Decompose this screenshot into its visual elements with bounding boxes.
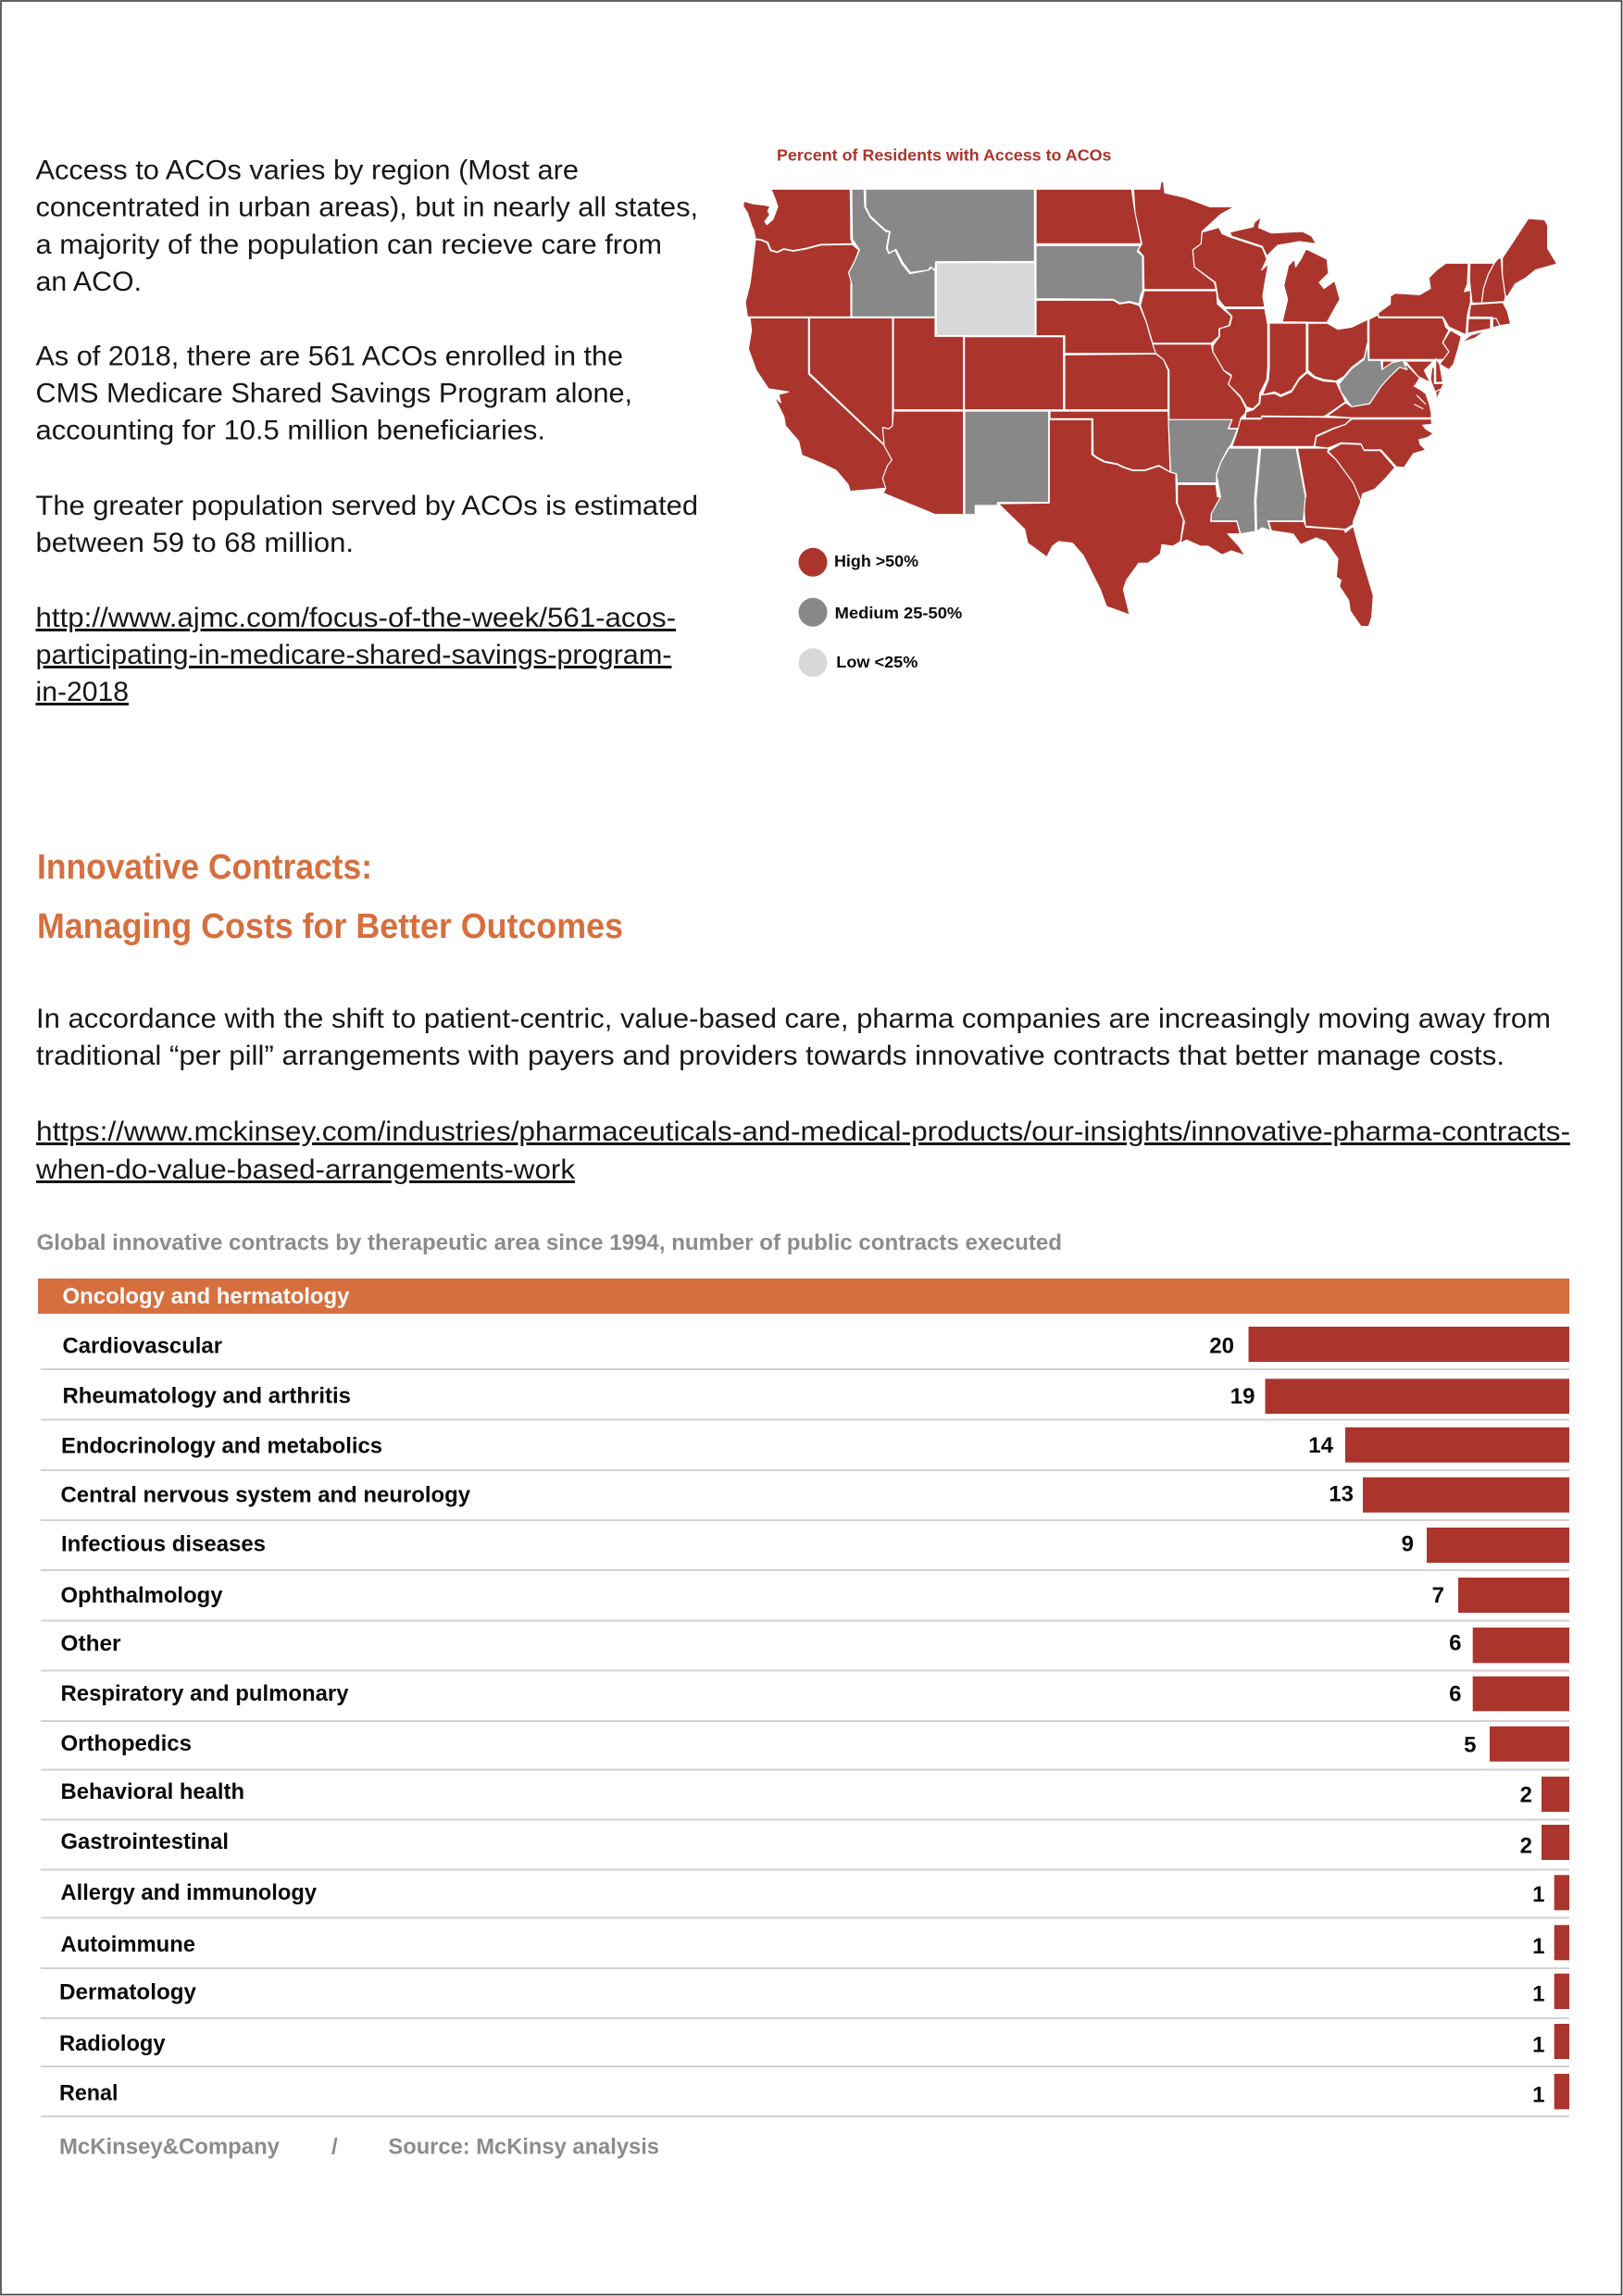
chart row: Rheumatology and arthritis	[63, 1379, 1569, 1414]
state: Arkansas	[1168, 419, 1238, 483]
state: Wyoming	[936, 263, 1035, 336]
chart row: Infectious diseases	[61, 1528, 1569, 1563]
text block: ACO access	[35, 156, 698, 297]
state: Nevada	[809, 318, 893, 444]
chart row: Autoimmune	[61, 1925, 1569, 1960]
state: Ohio	[1308, 319, 1367, 381]
chart row: Cardiovascular: 20	[1209, 1334, 1234, 1359]
text block: ACO access: an ACO.	[35, 267, 142, 297]
chart row: Allergy and immunology: 1	[1532, 1882, 1544, 1907]
chart row: Gastrointestinal: 2	[1520, 1834, 1532, 1859]
state: Maine	[1503, 218, 1557, 296]
state: Idaho	[849, 189, 935, 317]
chart row: Radiology: 1	[1532, 2033, 1544, 2058]
text block: McKinsey link: https://www.mckinsey.com/industries/pharmaceuticals-and-medical-products/our-insights/innovative-pharma-contracts-	[36, 1117, 1570, 1147]
state: Vermont	[1469, 263, 1494, 303]
chart row: Rheumatology and arthritis: 19	[1230, 1384, 1255, 1409]
legend: medium	[798, 598, 963, 627]
state: Georgia	[1297, 448, 1361, 530]
state: Colorado	[965, 337, 1064, 410]
text block: contracts intro: traditional “per pill” arrangements with payers and providers towards innovative contracts that better manage costs.	[36, 1041, 1504, 1071]
state: Massachusetts	[1469, 303, 1511, 326]
legend: high	[798, 548, 918, 577]
chart row: Radiology	[59, 2024, 1569, 2059]
state: New Mexico	[965, 411, 1049, 515]
state: Utah	[893, 318, 964, 410]
state: Oregon	[745, 240, 859, 317]
state: Texas	[998, 419, 1183, 615]
state: Illinois	[1213, 308, 1267, 409]
state: Minnesota	[1133, 181, 1234, 290]
state: Long Island	[1461, 331, 1485, 343]
legend: low	[798, 648, 918, 677]
state: Louisiana	[1178, 484, 1245, 555]
footer source line: /	[331, 2135, 338, 2160]
text block: AJMC link: participating-in-medicare-shared-savings-program-	[35, 640, 672, 670]
chart row: Other: Other	[61, 1631, 120, 1656]
chart row: Renal: Renal	[59, 2081, 119, 2105]
text block: CMS enrollment: accounting for 10.5 million beneficiaries.	[35, 415, 545, 446]
text block: ACO access: Access to ACOs varies by region (Most are	[35, 156, 579, 185]
state: Tennessee	[1232, 417, 1352, 446]
state: Maryland eastern shore	[1430, 368, 1443, 392]
state: North Dakota	[1036, 189, 1142, 243]
text block: McKinsey link: when-do-value-based-arrangements-work	[35, 1154, 576, 1185]
chart row: Orthopedics	[61, 1727, 1569, 1762]
text block: CMS enrollment: As of 2018, there are 561 ACOs enrolled in the	[35, 341, 623, 372]
state: Wisconsin	[1192, 228, 1268, 307]
chart row: Oncology and hermatology	[38, 1279, 1569, 1314]
chart row: Dermatology: 1	[1532, 1982, 1544, 2007]
state: California	[748, 318, 892, 492]
state: Mississippi	[1211, 448, 1259, 534]
state: Kentucky	[1245, 373, 1345, 418]
state: Pennsylvania	[1369, 315, 1449, 359]
chart subtitle: Global innovative contracts by therapeutic area since 1994, number of public contracts executed	[37, 1230, 1062, 1255]
map title: Percent of Residents with Access to ACOs	[777, 146, 1112, 165]
heading: innovative contracts	[37, 848, 623, 946]
chart row: Autoimmune: 1	[1532, 1934, 1544, 1959]
state: Washington	[743, 189, 853, 252]
chart row: Allergy and immunology	[61, 1875, 1569, 1910]
state: Florida	[1268, 521, 1373, 627]
chart row: Central nervous system and neurology: Central nervous system and neurology	[61, 1483, 471, 1507]
chart row: Dermatology: Dermatology	[59, 1979, 197, 2005]
chart row: Behavioral health: 2	[1520, 1783, 1532, 1808]
chart row: Orthopedics: Orthopedics	[61, 1731, 192, 1756]
heading: innovative contracts: Innovative Contracts:	[37, 848, 372, 887]
chart row: Infectious diseases: Infectious diseases	[61, 1532, 266, 1557]
state: Connecticut	[1467, 318, 1491, 333]
chart row: Other	[61, 1628, 1569, 1663]
state: Indiana	[1262, 323, 1306, 395]
state: Montana	[866, 189, 1034, 272]
chart row: Other: 6	[1449, 1631, 1461, 1655]
state: New Hampshire	[1481, 258, 1505, 303]
chart row: Cardiovascular	[63, 1327, 1569, 1362]
state: Missouri	[1153, 344, 1246, 429]
legend: medium: Medium 25-50%	[835, 604, 963, 622]
text block: CMS enrollment	[35, 341, 632, 446]
state: Alabama	[1256, 448, 1305, 531]
footer source line: Source: McKinsy analysis	[388, 2135, 659, 2160]
chart row: Cardiovascular: Cardiovascular	[63, 1334, 222, 1359]
chart row: Ophthalmology: 7	[1432, 1583, 1444, 1608]
text block: population estimate: between 59 to 68 million.	[35, 528, 354, 558]
state: North Carolina	[1315, 419, 1433, 468]
text block: AJMC link	[35, 603, 676, 707]
state: Iowa	[1141, 291, 1231, 343]
state: Michigan upper	[1230, 217, 1317, 256]
text block: ACO access: concentrated in urban areas), but in nearly all states,	[35, 193, 698, 222]
heading: innovative contracts: Managing Costs for Better Outcomes	[37, 907, 623, 946]
state: Kansas	[1065, 354, 1168, 410]
chart row: Behavioral health	[61, 1777, 1569, 1812]
state: Michigan lower	[1282, 249, 1340, 322]
chart row: Ophthalmology: Ophthalmology	[61, 1583, 223, 1608]
chart row: Endocrinology and metabolics	[61, 1428, 1569, 1463]
footer source line	[59, 2135, 659, 2160]
legend: high: High >50%	[834, 552, 918, 570]
chart row: Dermatology	[59, 1974, 1569, 2009]
chart row: Respiratory and pulmonary: Respiratory and pulmonary	[61, 1681, 349, 1706]
text block: population estimate: The greater population served by ACOs is estimated	[35, 491, 698, 521]
chart row: Allergy and immunology: Allergy and immunology	[61, 1880, 318, 1905]
chart row: Central nervous system and neurology	[61, 1478, 1569, 1513]
state: West Virginia	[1339, 344, 1407, 406]
state: Rhode Island	[1492, 318, 1500, 328]
state: Virginia eastern shore	[1435, 385, 1442, 400]
chart row: Oncology and hermatology: Oncology and hermatology	[63, 1284, 350, 1309]
states: high access	[743, 181, 1557, 627]
chart row: Ophthalmology	[61, 1578, 1569, 1613]
state: South Carolina	[1328, 443, 1395, 502]
state: New York	[1378, 263, 1470, 335]
text block: McKinsey link	[35, 1117, 1570, 1185]
text block: ACO access: a majority of the population can recieve care from	[35, 230, 662, 260]
legend: low: Low <25%	[836, 653, 918, 671]
chart row: Gastrointestinal: Gastrointestinal	[61, 1829, 229, 1854]
chart row: Gastrointestinal	[61, 1825, 1569, 1860]
chart row: Renal	[59, 2074, 1569, 2109]
state: Delaware	[1436, 358, 1442, 382]
state: Nebraska	[1036, 300, 1156, 354]
state: Maryland	[1382, 361, 1433, 382]
text block: contracts intro	[36, 1004, 1551, 1071]
states: low access	[936, 263, 1035, 336]
chart row: Behavioral health: Behavioral health	[61, 1779, 244, 1804]
chart row: Respiratory and pulmonary	[61, 1677, 1569, 1711]
chart row: Endocrinology and metabolics: 14	[1308, 1433, 1334, 1458]
chart row: Renal: 1	[1532, 2083, 1544, 2108]
chart row: Infectious diseases: 9	[1402, 1532, 1414, 1557]
state: South Dakota	[1036, 245, 1142, 304]
chart row: Central nervous system and neurology: 13	[1329, 1482, 1354, 1507]
states: medium access	[849, 189, 1407, 534]
text block: population estimate	[35, 491, 698, 558]
chart row: Respiratory and pulmonary: 6	[1449, 1682, 1461, 1707]
chart row: Autoimmune: Autoimmune	[61, 1932, 195, 1957]
chart row: Orthopedics: 5	[1464, 1732, 1476, 1757]
state: Oklahoma	[1050, 411, 1170, 472]
text block: contracts intro: In accordance with the shift to patient-centric, value-based care, pharma companies are increasingly moving away from	[36, 1004, 1551, 1034]
US choropleth map	[743, 181, 1557, 627]
state: Arizona	[882, 411, 964, 515]
chart row: Rheumatology and arthritis: Rheumatology and arthritis	[63, 1384, 351, 1409]
state: Virginia	[1327, 365, 1431, 418]
text block: CMS enrollment: CMS Medicare Shared Savings Program alone,	[35, 378, 632, 409]
chart row: Endocrinology and metabolics: Endocrinology and metabolics	[61, 1433, 382, 1458]
chart row: Radiology: Radiology	[59, 2031, 166, 2056]
state: New Jersey	[1440, 331, 1461, 369]
text block: AJMC link: in-2018	[35, 677, 129, 707]
footer source line: McKinsey&Company	[59, 2135, 281, 2160]
text block: AJMC link: http://www.ajmc.com/focus-of-the-week/561-acos-	[35, 603, 676, 633]
bar chart: contracts by therapeutic area	[38, 1279, 1569, 2117]
map legend	[798, 548, 963, 677]
